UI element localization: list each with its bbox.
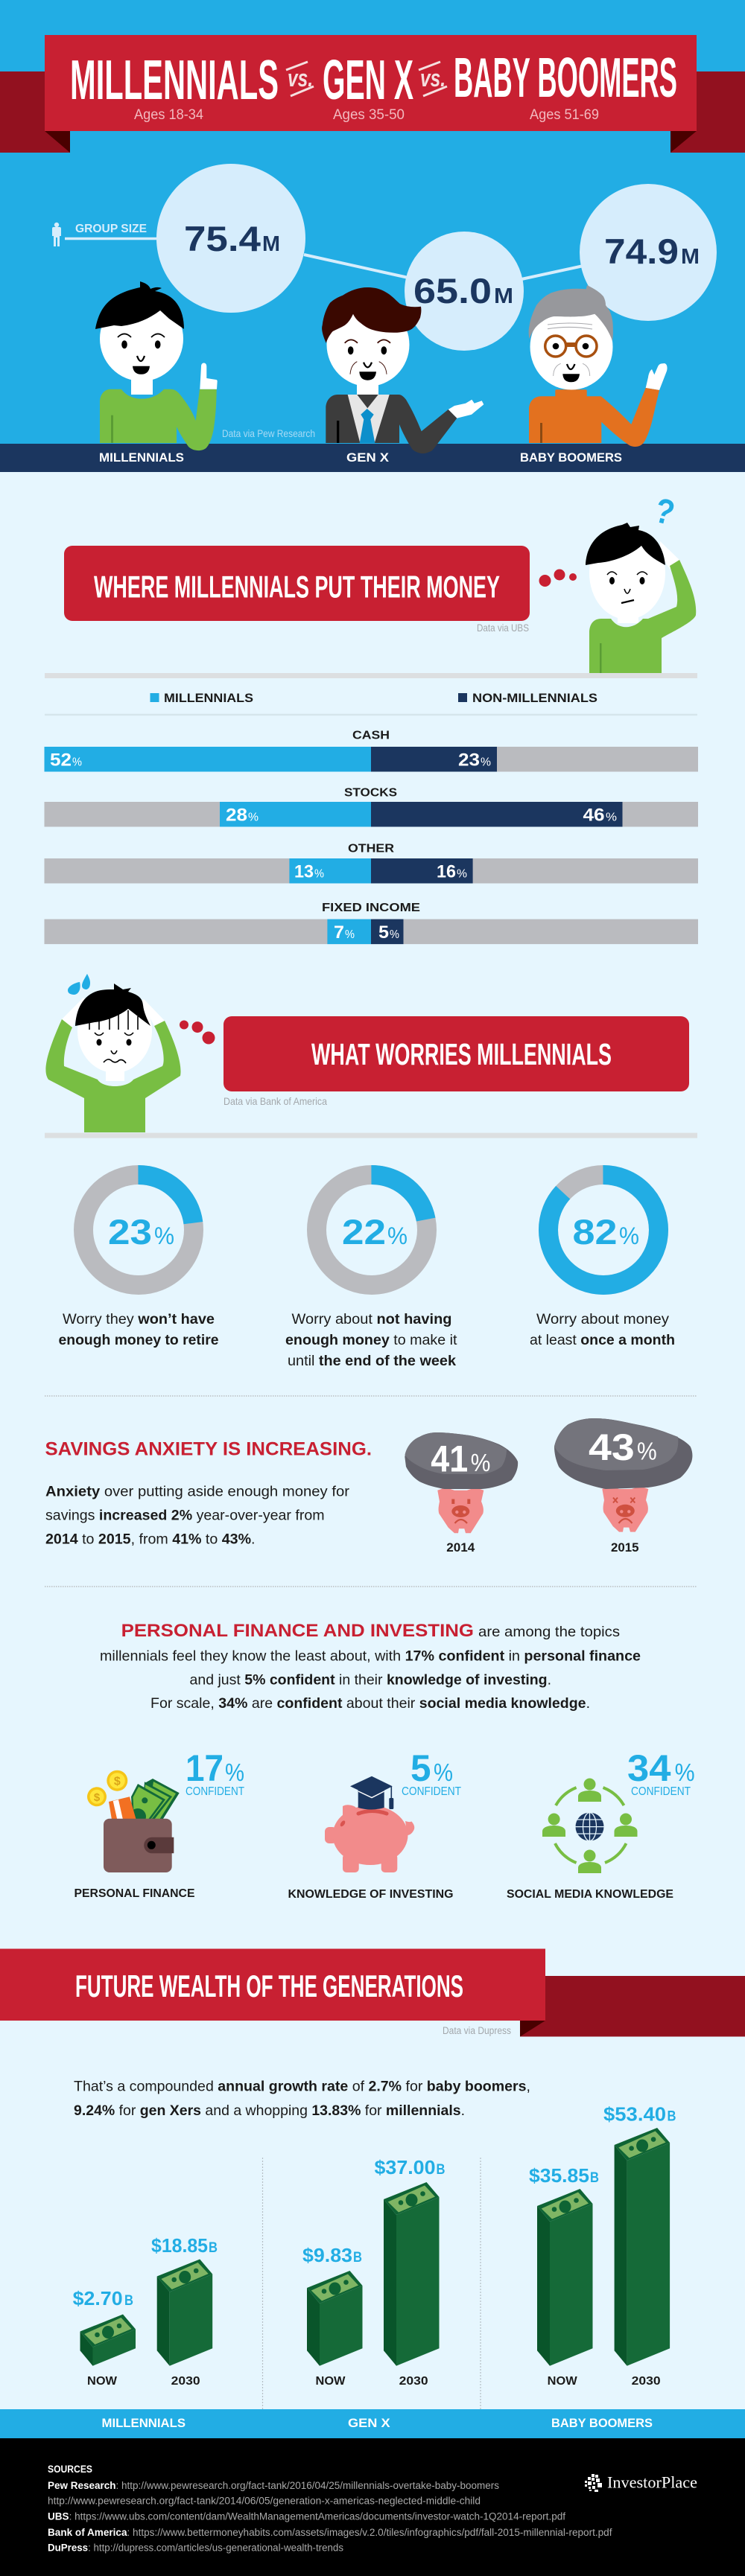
value: 37.00B: B	[437, 2162, 446, 2178]
icon: pig under rock 2014: %	[471, 1449, 490, 1476]
donut chart: 22 percent: 22	[342, 1212, 386, 1252]
sources list: Pew Research: http://www.pewresearch.org/fact-tank/2016/04/25/millennials-overtake-baby-boomers	[48, 2480, 499, 2491]
generation labels band: BABY BOOMERS	[551, 2416, 653, 2430]
group size label with person icon: GROUP SIZE	[75, 223, 147, 235]
label: 2030: 2030	[632, 2375, 661, 2388]
text block: compounded growth rates	[74, 2079, 530, 2119]
section heading: where millennials put their money	[64, 546, 577, 634]
caption: end of week worry: Worry about not having	[292, 1312, 451, 1327]
title banner: GEN X	[323, 48, 413, 111]
bubble: gen x 65.0M: 65.0	[413, 271, 492, 310]
icon: piggy bank with graduation cap	[325, 1776, 414, 1872]
bar row: stocks: 28	[226, 806, 247, 825]
value: 9.83B: B	[353, 2250, 362, 2266]
icon: wallet with cash and coins: $	[114, 1775, 121, 1788]
money stack: millennials 2030	[157, 2259, 212, 2366]
icon: worried millennial	[45, 974, 181, 1132]
stat: 34 percent confident: 34	[627, 1747, 671, 1789]
donut chart: 23 percent: 23	[108, 1212, 152, 1252]
text block: personal finance and investing: millennials feel they know the least about, with 17% confident in personal finance	[100, 1648, 641, 1665]
bar row: cash: CASH	[352, 730, 390, 742]
section heading: what worries millennials	[180, 1016, 689, 1107]
bar row: other: 16	[437, 862, 456, 881]
money stack: boomers now	[537, 2189, 593, 2366]
generation name band	[0, 444, 745, 472]
bubble: millennials 75.4M: 75.4	[184, 219, 261, 258]
value: 18.85B: $18.85	[151, 2234, 208, 2257]
label: knowledge of investing: KNOWLEDGE OF INVESTING	[288, 1888, 453, 1901]
bar row: cash: 52	[50, 750, 72, 770]
icon: confused millennial with question mark: ?	[651, 490, 679, 532]
caption: end of week worry	[285, 1312, 457, 1369]
icon: confused millennial with question mark	[586, 490, 696, 673]
bar row: fixed income: 7	[334, 922, 344, 943]
stat: 34 percent confident: CONFIDENT	[631, 1785, 691, 1798]
title banner: Ages 18-34	[134, 107, 203, 123]
stat: 17 percent confident: %	[225, 1759, 244, 1786]
bar chart: where millennials put their money	[45, 730, 698, 944]
icon: people around a globe	[542, 1778, 638, 1873]
bar row: fixed income: %	[345, 928, 355, 941]
bar row: stocks: 46	[583, 806, 605, 825]
text block: personal finance and investing: PERSONAL FINANCE AND INVESTING	[121, 1621, 474, 1641]
bar row: stocks	[45, 786, 698, 826]
text block: compounded growth rates: That’s a compounded annual growth rate of 2.7% for baby boomers,	[74, 2079, 530, 2095]
panel: personal finance confidence	[74, 1747, 244, 1900]
text block: personal finance and investing: are among the topics	[478, 1624, 620, 1640]
bar row: fixed income: FIXED INCOME	[322, 902, 420, 914]
donut chart: 82 percent	[548, 1175, 659, 1285]
caption: retire worry: enough money to retire	[58, 1333, 219, 1348]
title banner: Ages 51-69	[530, 107, 599, 123]
donut chart: 23 percent	[83, 1175, 194, 1285]
text block: savings anxiety explanation	[45, 1483, 350, 1548]
label: now: NOW	[87, 2375, 118, 2388]
bubble: baby boomers 74.9M: 74.9	[604, 232, 679, 271]
sources list: UBS: https://www.ubs.com/content/dam/WealthManagementAmericas/documents/investor-watch-1Q2014-report.pdf	[48, 2510, 565, 2522]
bar row: cash: 23	[458, 750, 480, 770]
icon: pig under rock 2015	[554, 1418, 692, 1555]
title banner: vs.	[288, 65, 313, 92]
money stack: millennials now	[80, 2314, 136, 2366]
caption: monthly worry: at least once a month	[530, 1333, 675, 1348]
stat: 5 percent confident	[402, 1747, 461, 1798]
sources list: Bank of America: https://www.bettermoneyhabits.com/assets/images/v.2.0/tiles/infographics/pdf/fall-2015-millennial-report.pdf	[48, 2527, 612, 2538]
section banner: future wealth of the generations: FUTURE WEALTH OF THE GENERATIONS	[75, 1968, 463, 2003]
bar row: stocks: %	[248, 812, 259, 823]
bubble: baby boomers 74.9M	[580, 184, 717, 321]
donut chart: 82 percent: %	[619, 1222, 639, 1249]
value: 18.85B: B	[209, 2240, 218, 2256]
donut chart: 22 percent: %	[387, 1222, 408, 1249]
generation labels band: GEN X	[348, 2416, 390, 2430]
icon: millennial character	[95, 281, 218, 450]
bar row: cash	[45, 730, 698, 771]
generation name band: GEN X	[346, 451, 389, 465]
generation name band: BABY BOOMERS	[520, 451, 622, 465]
stat: 34 percent confident	[627, 1747, 695, 1798]
sources list	[48, 2464, 612, 2554]
bubble: baby boomers 74.9M: M	[681, 245, 700, 269]
bar row: other: %	[314, 868, 324, 880]
chart: baby boomers wealth	[529, 2102, 676, 2388]
heading: savings anxiety: SAVINGS ANXIETY IS INCREASING.	[45, 1438, 372, 1459]
stat: 17 percent confident	[186, 1747, 244, 1798]
sources list: SOURCES	[48, 2464, 92, 2475]
legend	[150, 691, 597, 705]
panel: knowledge of investing confidence	[288, 1747, 461, 1901]
title banner: vs.	[420, 65, 446, 92]
bar row: other: 13	[294, 862, 314, 881]
label: now: NOW	[316, 2375, 346, 2388]
value: 2.70B: B	[124, 2293, 133, 2309]
caption: retire worry	[58, 1312, 219, 1348]
label: now: NOW	[548, 2375, 578, 2388]
donut chart: 23 percent: %	[154, 1222, 174, 1249]
value: 35.85B: B	[590, 2170, 599, 2186]
legend: MILLENNIALS	[164, 691, 253, 705]
caption: retire worry: Worry they won’t have	[63, 1312, 215, 1327]
icon: pig under rock 2014: 41	[431, 1438, 468, 1480]
legend: NON-MILLENNIALS	[472, 691, 597, 705]
stat: 5 percent confident: %	[434, 1759, 453, 1786]
icon: baby boomer character	[529, 285, 668, 447]
stat: 17 percent confident: 17	[186, 1747, 224, 1789]
label: personal finance: PERSONAL FINANCE	[74, 1887, 195, 1900]
text block: personal finance and investing: For scale, 34% are confident about their social media knowledge.	[150, 1695, 590, 1712]
logo: InvestorPlace: InvestorPlace	[607, 2473, 697, 2492]
bar row: other: OTHER	[348, 843, 394, 855]
chart: millennials wealth	[73, 2234, 218, 2388]
stat: 34 percent confident: %	[675, 1759, 695, 1786]
value: 37.00B: $37.00	[374, 2156, 435, 2178]
icon: gen x character	[322, 287, 484, 453]
icon: pig under rock 2015: 43	[589, 1426, 635, 1468]
text block: savings anxiety explanation: savings increased 2% year-over-year from	[45, 1508, 325, 1524]
sources list: DuPress: http://dupress.com/articles/us-generational-wealth-trends	[48, 2542, 343, 2554]
text block: compounded growth rates: 9.24% for gen Xers and a whopping 13.83% for millennials.	[74, 2102, 465, 2119]
caption: monthly worry	[530, 1312, 675, 1348]
label: 2030: 2030	[399, 2375, 428, 2388]
panel: social media knowledge confidence	[507, 1747, 695, 1901]
section banner: future wealth of the generations	[0, 1949, 745, 2037]
generation name band: MILLENNIALS	[99, 451, 184, 465]
bar row: cash: %	[481, 756, 491, 768]
text block: personal finance and investing	[100, 1621, 641, 1712]
icon: pig under rock 2014	[405, 1432, 518, 1555]
bar row: fixed income: %	[390, 928, 399, 941]
caption: end of week worry: until the end of the week	[288, 1354, 456, 1369]
icon: wallet with cash and coins	[87, 1770, 180, 1872]
value: 53.40B: B	[668, 2108, 676, 2125]
icon: pig under rock 2015: 2015	[611, 1540, 639, 1555]
icon: pig under rock 2014: 2014	[446, 1540, 475, 1555]
section heading: where millennials put their money: Data via UBS	[477, 622, 529, 634]
caption: end of week worry: enough money to make it	[285, 1333, 457, 1348]
bar row: other	[45, 843, 698, 883]
value: 9.83B: $9.83	[302, 2244, 352, 2266]
caption: monthly worry: Worry about money	[536, 1312, 670, 1327]
bar row: stocks: %	[606, 812, 617, 823]
bubble: millennials 75.4M	[156, 164, 305, 313]
stat: 5 percent confident: CONFIDENT	[402, 1785, 461, 1798]
panel: sources footer	[0, 2438, 745, 2576]
bubble: millennials 75.4M: M	[262, 232, 280, 256]
bar row: fixed income: 5	[378, 922, 389, 943]
text block: savings anxiety explanation: 2014 to 2015, from 41% to 43%.	[45, 1531, 255, 1548]
bar row: other: %	[457, 868, 467, 880]
chart: gen x wealth	[302, 2156, 446, 2388]
label: 2030: 2030	[171, 2375, 200, 2388]
value: 2.70B: $2.70	[73, 2287, 123, 2309]
section banner: future wealth of the generations: Data via Dupress	[443, 2025, 511, 2036]
title banner: MILLENNIALS	[70, 48, 279, 111]
title banner: Ages 35-50	[333, 107, 405, 123]
bar row: stocks: STOCKS	[344, 786, 397, 800]
value: 53.40B: $53.40	[603, 2102, 666, 2125]
stat: 17 percent confident: CONFIDENT	[186, 1785, 244, 1798]
panel: header and group size	[0, 0, 745, 472]
label: social media knowledge: SOCIAL MEDIA KNOWLEDGE	[507, 1888, 673, 1901]
money stack: boomers 2030	[615, 2128, 670, 2366]
title banner	[0, 35, 745, 153]
text block: personal finance and investing: and just 5% confident in their knowledge of investing.	[189, 1672, 551, 1689]
bubble: gen x 65.0M	[405, 232, 524, 351]
section heading: what worries millennials: Data via Bank of America	[224, 1095, 327, 1107]
sources list: http://www.pewresearch.org/fact-tank/2014/06/05/generation-x-americas-neglected-middle-child	[48, 2496, 481, 2507]
text block: savings anxiety explanation: Anxiety over putting aside enough money for	[45, 1483, 350, 1499]
donut chart: 82 percent: 82	[572, 1212, 617, 1252]
section heading: where millennials put their money: WHERE MILLENNIALS PUT THEIR MONEY	[94, 569, 500, 605]
stat: 5 percent confident: 5	[410, 1747, 431, 1789]
bar row: fixed income	[45, 902, 698, 944]
icon: pig under rock 2015: %	[637, 1437, 657, 1465]
group size label with person icon	[52, 223, 158, 246]
bar row: cash: %	[72, 756, 82, 768]
generation labels band: MILLENNIALS	[101, 2416, 186, 2430]
icon: wallet with cash and coins: $	[94, 1791, 101, 1804]
value: 35.85B: $35.85	[529, 2164, 589, 2187]
donut chart: 22 percent	[317, 1175, 427, 1285]
money stack: gen x 2030	[384, 2182, 440, 2366]
data source note: Data via Pew Research	[222, 427, 315, 439]
generation labels band	[0, 2409, 745, 2438]
money stack: gen x now	[307, 2271, 362, 2366]
bubble: gen x 65.0M: M	[494, 284, 513, 308]
